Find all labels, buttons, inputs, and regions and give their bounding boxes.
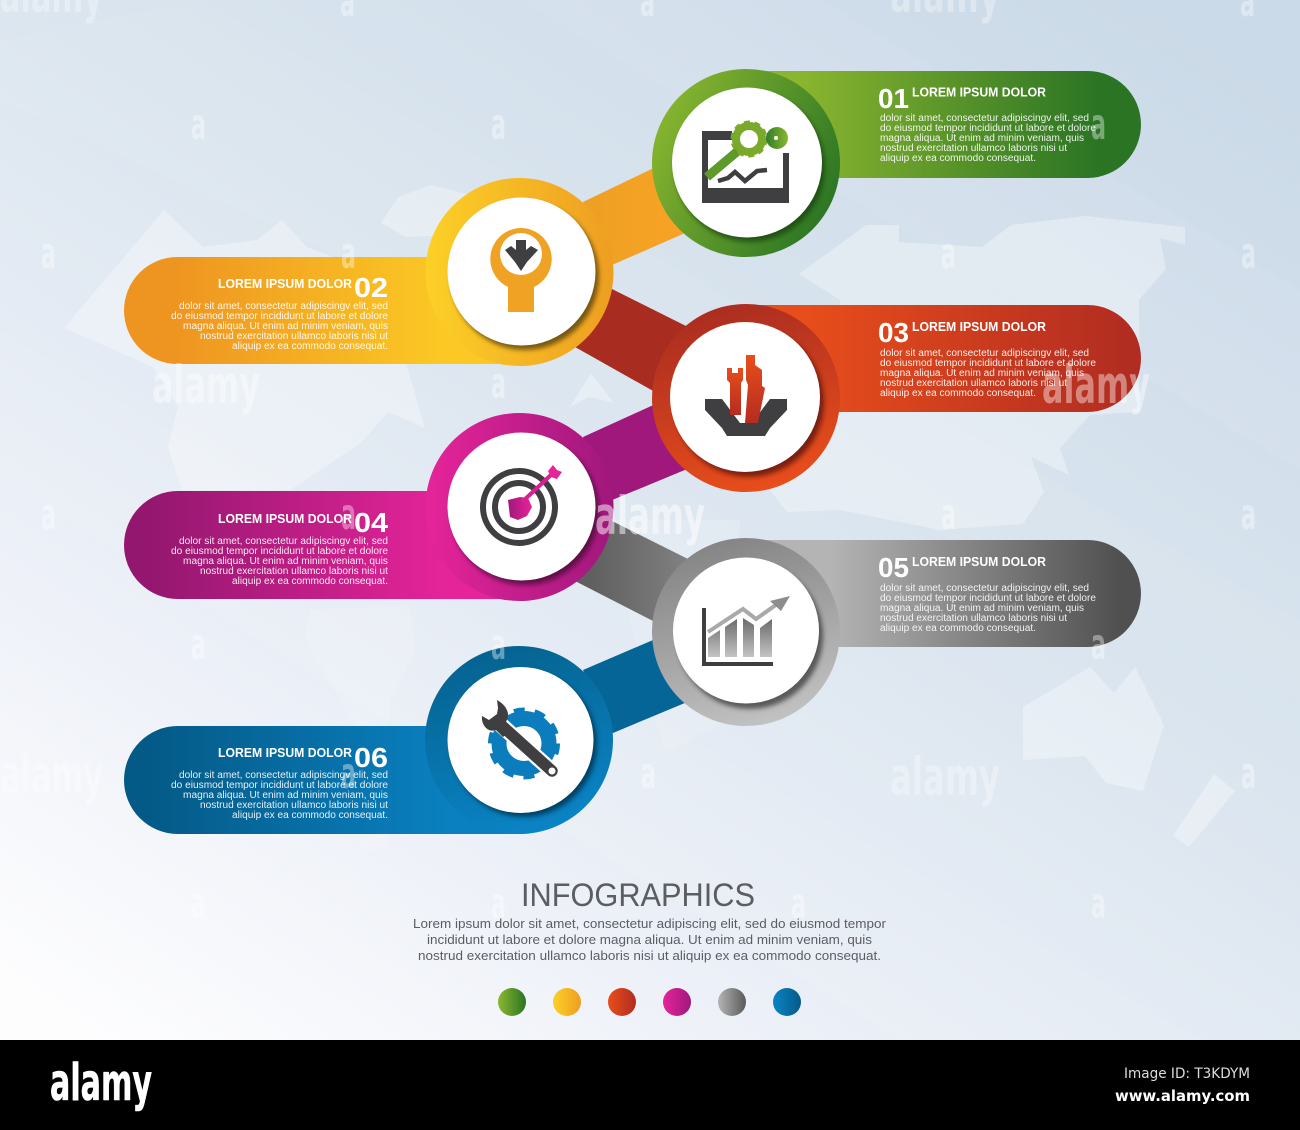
text block 02: do eiusmod tempor incididunt ut labore et dolore xyxy=(171,311,388,322)
heading 05: LOREM IPSUM DOLOR xyxy=(912,555,1046,569)
text block 06 xyxy=(171,770,388,821)
text block 06: nostrud exercitation ullamco laboris nisi ut xyxy=(200,800,388,811)
watermark text: a xyxy=(341,749,356,799)
watermark text: alamy xyxy=(0,745,103,806)
text block 01: nostrud exercitation ullamco laboris nisi ut xyxy=(880,143,1067,154)
watermark text: alamy xyxy=(595,486,705,547)
number 02: 02 xyxy=(354,272,388,303)
description text: incididunt ut labore et dolore magna aliqua. Ut enim ad minim veniam, quis xyxy=(427,932,873,947)
text block 06: do eiusmod tempor incididunt ut labore et dolore xyxy=(171,780,388,791)
watermark text: a xyxy=(791,879,806,929)
world map silhouette xyxy=(64,185,1235,850)
watermark text: a xyxy=(1241,749,1256,799)
text block 03: nostrud exercitation ullamco laboris nisi ut xyxy=(880,378,1067,389)
text block 01: magna aliqua. Ut enim ad minim veniam, quis xyxy=(880,133,1084,144)
text block 02: nostrud exercitation ullamco laboris nisi ut xyxy=(200,331,388,342)
watermark text: a xyxy=(341,490,356,540)
connector: step 2 to step 1 xyxy=(583,165,692,265)
panel: step 05 xyxy=(652,538,1141,726)
text block 04: magna aliqua. Ut enim ad minim veniam, quis xyxy=(183,556,388,567)
text block 04: nostrud exercitation ullamco laboris nisi ut xyxy=(200,566,388,577)
watermark text xyxy=(0,0,1256,929)
watermark text: a xyxy=(791,100,806,150)
icon: target with dart xyxy=(483,465,562,543)
text block 04: aliquip ex ea commodo consequat. xyxy=(232,576,388,587)
connector: step 6 to step 5 xyxy=(583,637,692,733)
panel: step 02 xyxy=(124,178,613,366)
watermark text: alamy xyxy=(152,355,260,416)
watermark text: a xyxy=(491,100,506,150)
text block 01: do eiusmod tempor incididunt ut labore et dolore xyxy=(880,123,1096,134)
text block 03: dolor sit amet, consectetur adipiscingv elit, sed xyxy=(880,348,1089,359)
heading 01: LOREM IPSUM DOLOR xyxy=(912,86,1046,100)
text block 02 xyxy=(171,301,388,352)
description text xyxy=(413,916,887,963)
watermark text: a xyxy=(941,229,956,279)
text block 04: do eiusmod tempor incididunt ut labore et dolore xyxy=(171,546,388,557)
watermark text: a xyxy=(1241,229,1256,279)
text block 05: aliquip ex ea commodo consequat. xyxy=(880,623,1036,634)
watermark text: a xyxy=(1091,879,1106,929)
watermark text: a xyxy=(191,879,206,929)
heading 02: LOREM IPSUM DOLOR xyxy=(218,277,352,291)
watermark text: a xyxy=(41,229,56,279)
watermark text: a xyxy=(1091,620,1106,670)
watermark text: a xyxy=(191,620,206,670)
watermark text: a xyxy=(491,620,506,670)
text block 05: dolor sit amet, consectetur adipiscingv elit, sed xyxy=(880,583,1089,594)
heading 06: LOREM IPSUM DOLOR xyxy=(218,746,352,760)
description text: nostrud exercitation ullamco laboris nisi ut aliquip ex ea commodo consequat. xyxy=(418,948,881,963)
text block 03 xyxy=(880,348,1096,399)
watermark text: alamy xyxy=(890,747,1000,808)
text block 04: dolor sit amet, consectetur adipiscingv elit, sed xyxy=(179,536,388,547)
icon: tools over anchor arc xyxy=(705,355,787,436)
text block 03: magna aliqua. Ut enim ad minim veniam, quis xyxy=(880,368,1084,379)
text block 04 xyxy=(171,536,388,587)
text block 05: magna aliqua. Ut enim ad minim veniam, quis xyxy=(880,603,1084,614)
panel: step 06 xyxy=(124,646,613,834)
text block 06: magna aliqua. Ut enim ad minim veniam, quis xyxy=(183,790,388,801)
watermark text: a xyxy=(41,490,56,540)
watermark text: a xyxy=(491,879,506,929)
text block 06: aliquip ex ea commodo consequat. xyxy=(232,810,388,821)
text block 03: do eiusmod tempor incididunt ut labore et dolore xyxy=(880,358,1096,369)
title: INFOGRAPHICS xyxy=(521,877,755,913)
number 01: 01 xyxy=(878,83,909,114)
text block 01: aliquip ex ea commodo consequat. xyxy=(880,153,1036,164)
icon: monitor with key xyxy=(702,122,789,203)
text block 03: aliquip ex ea commodo consequat. xyxy=(880,388,1036,399)
watermark text: a xyxy=(341,229,356,279)
icon: light bulb with arrow xyxy=(490,228,552,312)
watermark text: a xyxy=(941,490,956,540)
text block 02: magna aliqua. Ut enim ad minim veniam, quis xyxy=(183,321,388,332)
alamy logo: alamy xyxy=(50,1054,152,1113)
connector: step 4 to step 3 xyxy=(583,402,692,503)
panel: step 01 xyxy=(652,69,1141,257)
panel: step 04 xyxy=(124,413,614,601)
connector: step 3 to step 2 xyxy=(575,288,690,392)
watermark text: a xyxy=(641,749,656,799)
legend dots xyxy=(498,988,801,1016)
watermark text: a xyxy=(191,100,206,150)
text block 05: nostrud exercitation ullamco laboris nisi ut xyxy=(880,613,1067,624)
connector: step 5 to step 4 xyxy=(575,520,690,622)
watermark text: a xyxy=(491,359,506,409)
heading 04: LOREM IPSUM DOLOR xyxy=(218,512,352,526)
number 03: 03 xyxy=(878,317,909,348)
text block 02: dolor sit amet, consectetur adipiscingv elit, sed xyxy=(179,301,388,312)
panel: step 03 xyxy=(652,304,1141,492)
icon: wrench and gear xyxy=(482,700,558,777)
text block 01: dolor sit amet, consectetur adipiscingv elit, sed xyxy=(880,113,1089,124)
watermark text: alamy xyxy=(1042,355,1150,416)
watermark text: a xyxy=(1091,100,1106,150)
text block 06: dolor sit amet, consectetur adipiscingv elit, sed xyxy=(179,770,388,781)
number 06: 06 xyxy=(354,742,388,773)
number 04: 04 xyxy=(354,507,388,538)
heading 03: LOREM IPSUM DOLOR xyxy=(912,320,1046,334)
description text: Lorem ipsum dolor sit amet, consectetur adipiscing elit, sed do eiusmod tempor xyxy=(413,916,887,931)
image id: Image ID: T3KDYM xyxy=(1124,1066,1250,1082)
footer bar xyxy=(0,1040,1300,1130)
text block 01 xyxy=(880,113,1096,164)
text block 02: aliquip ex ea commodo consequat. xyxy=(232,341,388,352)
icon: rising bar chart xyxy=(702,596,790,666)
number 05: 05 xyxy=(878,552,909,583)
site url: www.alamy.com xyxy=(1115,1087,1250,1105)
text block 05: do eiusmod tempor incididunt ut labore et dolore xyxy=(880,593,1096,604)
watermark text: a xyxy=(791,620,806,670)
text block 05 xyxy=(880,583,1096,634)
watermark text: a xyxy=(1241,490,1256,540)
